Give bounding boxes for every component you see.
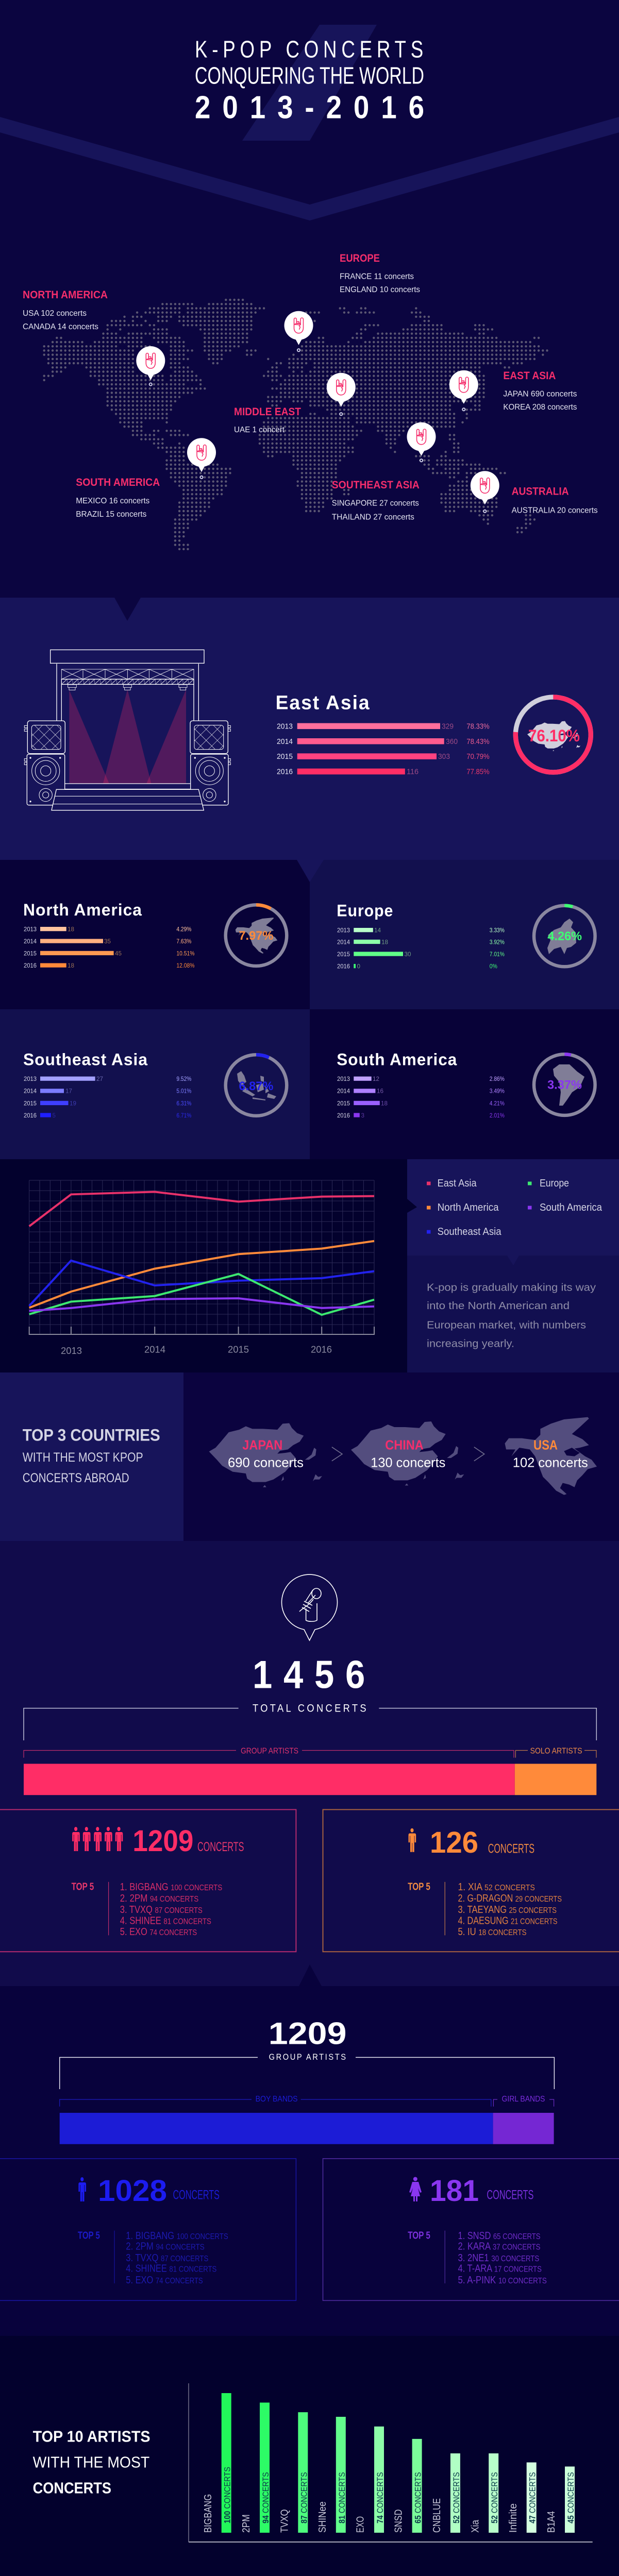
box: boy bands bbox=[0, 2159, 296, 2300]
top 5 list: 3. TAEYANG 25 CONCERTS bbox=[458, 1904, 557, 1916]
top 5 label: TOP 5 bbox=[408, 2230, 430, 2241]
artist names: EXO bbox=[355, 2516, 366, 2533]
notch between regional panels bbox=[297, 860, 324, 882]
bar chart: east asia: 360 bbox=[446, 737, 458, 746]
heading: southeast asia: Southeast Asia bbox=[23, 1050, 148, 1069]
value labels: 65 CONCERTS bbox=[413, 2472, 423, 2523]
chart year labels: 2014 bbox=[144, 1345, 165, 1355]
heading: north america: North America bbox=[23, 901, 142, 919]
donut chart: south america 3.37% bbox=[534, 1054, 595, 1115]
commentary text: increasing yearly. bbox=[427, 1338, 514, 1349]
bracket: total bbox=[24, 1708, 596, 1740]
bar chart: north america: 35 bbox=[104, 938, 111, 945]
artist names: BIGBANG bbox=[203, 2494, 214, 2533]
top 5 list: 4. T-ARA 17 CONCERTS bbox=[458, 2263, 542, 2275]
bar chart: south america: 18 bbox=[381, 1099, 388, 1107]
map: china: CHINA bbox=[385, 1437, 424, 1452]
panel: total concerts bbox=[0, 1541, 619, 1986]
value labels: 45 CONCERTS bbox=[566, 2472, 576, 2523]
line: south america bbox=[29, 1298, 374, 1311]
heading: top 10 artists: WITH THE MOST bbox=[33, 2453, 149, 2471]
stat: group concerts: 1209 bbox=[132, 1824, 193, 1858]
bar chart: south america: 2015 bbox=[337, 1099, 350, 1107]
stat unit: CONCERTS bbox=[197, 1840, 244, 1854]
bar chart: europe: 3.92% bbox=[490, 938, 505, 945]
panel: group artists bbox=[0, 1986, 619, 2336]
value labels: 81 CONCERTS bbox=[337, 2472, 347, 2523]
box: group artists bbox=[0, 1809, 296, 1952]
title: CONQUERING THE WORLD bbox=[195, 62, 424, 89]
bar chart: east asia bbox=[277, 722, 490, 776]
bar chart: north america: 18 bbox=[68, 962, 74, 969]
top 5 list: 1. BIGBANG 100 CONCERTS bbox=[120, 1882, 222, 1893]
bar chart: east asia: 116 bbox=[407, 768, 419, 776]
donut chart: southeast asia 6.87% bbox=[226, 1055, 287, 1116]
bar chart: east asia: 77.85% bbox=[466, 768, 490, 776]
top 5 list: 3. TVXQ 87 CONCERTS bbox=[120, 1904, 203, 1916]
map: usa: 102 concerts bbox=[513, 1454, 588, 1470]
value labels: 74 CONCERTS bbox=[375, 2472, 385, 2523]
top 5 list: 5. EXO 74 CONCERTS bbox=[120, 1926, 197, 1938]
top 5 list bbox=[458, 2230, 547, 2286]
icon: five people bbox=[72, 1827, 123, 1851]
map: japan bbox=[209, 1423, 322, 1487]
bar chart: europe: 2014 bbox=[337, 938, 350, 945]
bar chart: southeast asia: 6.31% bbox=[176, 1099, 192, 1107]
label: southeast asia: SINGAPORE 27 concerts bbox=[332, 499, 419, 508]
top 5 list bbox=[458, 1882, 562, 1938]
bar chart: southeast asia: 9.52% bbox=[176, 1075, 192, 1082]
icon: hand holding microphone bbox=[281, 1574, 337, 1640]
background: chevron band bbox=[0, 117, 619, 221]
bar chart: south america: 16 bbox=[377, 1088, 383, 1095]
bar chart: south america bbox=[337, 1075, 505, 1119]
bar chart: east asia: 2015 bbox=[277, 752, 293, 761]
bracket: group total bbox=[60, 2057, 554, 2089]
stat: solo concerts: 126 bbox=[430, 1826, 478, 1859]
value labels bbox=[223, 2467, 576, 2523]
commentary text bbox=[427, 1282, 596, 1349]
label: europe: ENGLAND 10 concerts bbox=[340, 285, 420, 294]
bar chart: east asia: 329 bbox=[442, 722, 454, 731]
icon: woman bbox=[409, 2177, 422, 2201]
bar chart: east asia: 78.33% bbox=[466, 722, 490, 731]
top 5 list: 5. IU 18 CONCERTS bbox=[458, 1926, 527, 1938]
label: middle east: MIDDLE EAST bbox=[234, 406, 301, 418]
panel: top 3 countries bbox=[183, 1372, 619, 1541]
top 5 list: 2. G-DRAGON 29 CONCERTS bbox=[458, 1893, 562, 1904]
bar chart: southeast asia: 2016 bbox=[24, 1112, 37, 1119]
chart axes bbox=[188, 2383, 189, 2542]
bar chart: southeast asia: 6.71% bbox=[176, 1112, 192, 1119]
top 5 list: 5. EXO 74 CONCERTS bbox=[126, 2275, 203, 2286]
label: east asia: EAST ASIA bbox=[503, 370, 556, 382]
bar chart: north america: 2016 bbox=[24, 962, 37, 969]
chart axis and ticks bbox=[29, 1327, 374, 1334]
donut chart: east asia 76.10%: 76.10% bbox=[528, 726, 580, 745]
background: title slash bbox=[242, 25, 377, 141]
stat unit: CONCERTS bbox=[173, 2188, 220, 2202]
map: europe bbox=[547, 919, 576, 954]
background: header and map section bbox=[0, 0, 619, 598]
bar chart: south america: 2.86% bbox=[490, 1075, 505, 1082]
top 5 divider bbox=[444, 2231, 445, 2283]
commentary text: into the North American and bbox=[427, 1300, 570, 1312]
top 5 list: 4. SHINEE 81 CONCERTS bbox=[126, 2263, 216, 2275]
bar chart: north america: 7.63% bbox=[176, 938, 192, 945]
bar chart: southeast asia: 2015 bbox=[24, 1099, 37, 1107]
label: solo artists: SOLO ARTISTS bbox=[530, 1747, 582, 1755]
title: 2013-2016 bbox=[195, 90, 436, 126]
group total number: 1209 bbox=[269, 2016, 346, 2050]
value labels: 47 CONCERTS bbox=[528, 2472, 538, 2523]
pin: middle east bbox=[327, 373, 356, 415]
value labels: 100 CONCERTS bbox=[223, 2467, 232, 2523]
value labels: 52 CONCERTS bbox=[490, 2472, 499, 2523]
top 5 list: 4. SHINEE 81 CONCERTS bbox=[120, 1916, 211, 1927]
bar chart: southeast asia: 17 bbox=[65, 1088, 72, 1095]
bar chart: europe: 2015 bbox=[337, 951, 350, 958]
title bbox=[195, 36, 436, 126]
label: south america: MEXICO 16 concerts bbox=[76, 497, 149, 505]
top 5 list: 2. 2PM 94 CONCERTS bbox=[120, 1893, 198, 1904]
pin: southeast asia bbox=[407, 422, 436, 462]
label: north america: NORTH AMERICA bbox=[23, 289, 108, 301]
top 5 list bbox=[120, 1882, 222, 1938]
value labels: 52 CONCERTS bbox=[451, 2472, 461, 2523]
bar chart: southeast asia: 5.01% bbox=[176, 1088, 192, 1095]
panel: top 3 countries heading: TOP 3 COUNTRIES bbox=[23, 1426, 160, 1444]
bar chart: north america: 12.08% bbox=[176, 962, 195, 969]
label: south america: SOUTH AMERICA bbox=[76, 477, 160, 488]
pin: north america bbox=[136, 346, 165, 386]
bar chart: southeast asia: 5 bbox=[53, 1112, 56, 1119]
artist names: CNBLUE bbox=[431, 2498, 443, 2533]
top 5 list: 3. TVXQ 87 CONCERTS bbox=[126, 2252, 208, 2264]
bar chart: europe bbox=[337, 926, 505, 970]
donut chart: east asia 76.10% bbox=[515, 697, 591, 772]
heading: top 10 artists: TOP 10 ARTISTS bbox=[33, 2427, 150, 2445]
artist names: 2PM bbox=[241, 2514, 252, 2533]
top 5 list: 1. SNSD 65 CONCERTS bbox=[458, 2230, 540, 2242]
arrow bbox=[474, 1447, 484, 1461]
line: east asia bbox=[29, 1192, 374, 1226]
label: southeast asia bbox=[332, 479, 420, 522]
legend: Southeast Asia bbox=[438, 1226, 501, 1238]
group total label: GROUP ARTISTS bbox=[269, 2052, 347, 2062]
map: usa bbox=[505, 1417, 597, 1495]
bar chart: southeast asia: 2014 bbox=[24, 1088, 37, 1095]
top 5 list: 5. A-PINK 10 CONCERTS bbox=[458, 2275, 547, 2286]
pin: east asia bbox=[449, 370, 478, 411]
panel: south america bbox=[310, 1009, 619, 1159]
line: north america bbox=[29, 1241, 374, 1308]
icon: person bbox=[409, 1828, 416, 1852]
box: solo artists bbox=[323, 1809, 619, 1952]
donut chart: north america 7.97%: 7.97% bbox=[239, 929, 273, 943]
bar chart: south america: 3.49% bbox=[490, 1088, 505, 1095]
heading: europe: Europe bbox=[337, 902, 393, 920]
panel: top 3 countries heading: CONCERTS ABROAD bbox=[23, 1471, 129, 1485]
map: usa: USA bbox=[533, 1437, 558, 1452]
pin: south america bbox=[187, 438, 216, 479]
pin: australia bbox=[471, 471, 499, 513]
map labels bbox=[23, 252, 598, 522]
legend: North America bbox=[438, 1202, 499, 1213]
stacked bar: boy vs girl bands bbox=[60, 2113, 554, 2144]
bar chart: east asia: 303 bbox=[438, 752, 450, 761]
grid lines bbox=[29, 1180, 374, 1334]
panel: top 3 countries heading: WITH THE MOST KPOP bbox=[23, 1450, 143, 1465]
artist names: Infinite bbox=[508, 2503, 519, 2533]
value labels: 87 CONCERTS bbox=[299, 2472, 309, 2523]
map: china: 130 concerts bbox=[371, 1454, 445, 1470]
top 5 list: 1. BIGBANG 100 CONCERTS bbox=[126, 2230, 228, 2242]
top 5 list: 1. XIA 52 CONCERTS bbox=[458, 1882, 535, 1893]
map: south america bbox=[553, 1064, 584, 1106]
artist names: SNSD bbox=[393, 2509, 405, 2533]
label: east asia: KOREA 208 concerts bbox=[503, 403, 577, 412]
label: europe: EUROPE bbox=[340, 252, 380, 264]
line: southeast asia bbox=[29, 1261, 374, 1306]
bracket: boy and girl bands bbox=[60, 2099, 554, 2107]
donut chart: north america 7.97% bbox=[226, 905, 287, 966]
bar chart: europe: 0 bbox=[357, 962, 360, 970]
line: europe bbox=[29, 1274, 374, 1315]
label: boy bands: BOY BANDS bbox=[256, 2095, 298, 2104]
map: southeast asia bbox=[237, 1071, 276, 1100]
bar chart: southeast asia bbox=[24, 1075, 192, 1119]
map: japan: JAPAN bbox=[242, 1437, 282, 1452]
label: east asia bbox=[503, 370, 577, 412]
chart year labels: 2015 bbox=[228, 1345, 249, 1355]
stat unit: CONCERTS bbox=[488, 1841, 534, 1856]
label: southeast asia: SOUTHEAST ASIA bbox=[332, 479, 420, 491]
top 5 label: TOP 5 bbox=[72, 1882, 94, 1893]
top 5 list bbox=[126, 2230, 228, 2286]
bar chart: north america: 2014 bbox=[24, 938, 37, 945]
panel: north america bbox=[0, 860, 310, 1009]
top 5 divider bbox=[444, 1882, 445, 1935]
bar chart: south america: 2016 bbox=[337, 1112, 350, 1119]
label: north america: USA 102 concerts bbox=[23, 309, 87, 318]
label: group artists: GROUP ARTISTS bbox=[241, 1747, 298, 1755]
bar chart: east asia: 70.79% bbox=[466, 752, 490, 761]
label: australia bbox=[512, 486, 598, 515]
dotted world map bbox=[44, 300, 547, 549]
map: china bbox=[351, 1421, 464, 1485]
artist names: B1A4 bbox=[546, 2511, 557, 2533]
icon: man bbox=[78, 2177, 86, 2201]
bar chart: east asia: 78.43% bbox=[466, 737, 490, 746]
bar chart: north america: 2013 bbox=[24, 925, 37, 933]
top 5 label: TOP 5 bbox=[78, 2230, 100, 2241]
donut chart: europe 4.26%: 4.26% bbox=[547, 929, 582, 943]
pin: europe bbox=[285, 311, 313, 351]
top 5 label: TOP 5 bbox=[408, 1882, 430, 1893]
panel: east asia bbox=[0, 598, 619, 860]
bar chart: east asia: 2013 bbox=[277, 722, 293, 731]
bar chart: north america: 4.29% bbox=[176, 925, 192, 933]
label: east asia: JAPAN 690 concerts bbox=[503, 389, 577, 398]
bar chart: north america: 10.51% bbox=[176, 950, 195, 957]
artist names bbox=[203, 2494, 557, 2533]
value labels: 94 CONCERTS bbox=[261, 2472, 271, 2523]
label: middle east bbox=[234, 406, 301, 434]
bar chart: north america: 18 bbox=[68, 925, 74, 933]
total label: TOTAL CONCERTS bbox=[253, 1703, 369, 1715]
bar chart: north america: 45 bbox=[115, 950, 122, 957]
bar chart: europe: 14 bbox=[374, 926, 381, 934]
bar chart: south america: 12 bbox=[373, 1075, 379, 1082]
title: K-POP CONCERTS bbox=[195, 36, 428, 63]
panel: line chart bbox=[0, 1159, 407, 1372]
label: south america: BRAZIL 15 concerts bbox=[76, 510, 146, 519]
top 5 list: 3. 2NE1 30 CONCERTS bbox=[458, 2252, 539, 2264]
artist names: SHINee bbox=[317, 2501, 328, 2533]
bracket: group and solo bbox=[24, 1751, 596, 1758]
map pins bbox=[136, 311, 499, 513]
panel: legend and commentary bbox=[407, 1159, 619, 1372]
legend: South America bbox=[540, 1202, 603, 1213]
chart year labels: 2013 bbox=[61, 1346, 82, 1356]
label: australia: AUSTRALIA bbox=[512, 486, 569, 498]
donut chart: europe 4.26% bbox=[534, 906, 595, 967]
box: girl bands bbox=[323, 2159, 619, 2300]
heading: east asia: East Asia bbox=[276, 692, 371, 714]
map: japan: 690 concerts bbox=[228, 1454, 304, 1470]
panel: top 10 artists bbox=[0, 2336, 619, 2576]
bar chart: east asia: 2014 bbox=[277, 737, 293, 746]
top 5 list: 2. KARA 37 CONCERTS bbox=[458, 2241, 540, 2252]
label: girl bands: GIRL BANDS bbox=[502, 2095, 545, 2104]
donut chart: south america 3.37%: 3.37% bbox=[547, 1078, 582, 1092]
top 5 list: 4. DAESUNG 21 CONCERTS bbox=[458, 1916, 558, 1927]
label: australia: AUSTRALIA 20 concerts bbox=[512, 506, 598, 515]
bar chart: europe: 0% bbox=[490, 962, 497, 970]
label: europe: FRANCE 11 concerts bbox=[340, 272, 414, 281]
bar chart: europe: 18 bbox=[381, 938, 388, 945]
donut chart: southeast asia 6.87%: 6.87% bbox=[239, 1079, 273, 1093]
chart year labels: 2016 bbox=[311, 1345, 332, 1355]
bar chart: south america: 2.01% bbox=[490, 1112, 505, 1119]
total number: 1456 bbox=[253, 1653, 376, 1697]
label: southeast asia: THAILAND 27 concerts bbox=[332, 513, 414, 522]
bar chart: europe: 3.33% bbox=[490, 926, 505, 934]
bar chart: north america: 2015 bbox=[24, 950, 37, 957]
label: north america: CANADA 14 concerts bbox=[23, 323, 98, 331]
bar chart: south america: 3 bbox=[361, 1112, 364, 1119]
legend bbox=[427, 1178, 603, 1238]
top 5 list: 2. 2PM 94 CONCERTS bbox=[126, 2241, 205, 2252]
chart baseline bbox=[189, 2541, 593, 2543]
bar chart: southeast asia: 27 bbox=[96, 1075, 103, 1082]
commentary text: K-pop is gradually making its way bbox=[427, 1282, 596, 1293]
legend: East Asia bbox=[438, 1178, 477, 1189]
label: north america bbox=[23, 289, 108, 331]
arrow bbox=[332, 1447, 342, 1461]
panel: europe bbox=[310, 860, 619, 1009]
bar chart: southeast asia: 19 bbox=[70, 1099, 76, 1107]
panel: southeast asia bbox=[0, 1009, 310, 1159]
bar chart: europe: 7.01% bbox=[490, 951, 505, 958]
heading: top 10 artists: CONCERTS bbox=[33, 2479, 111, 2497]
bar chart: southeast asia: 2013 bbox=[24, 1075, 37, 1082]
bar chart: south america: 4.21% bbox=[490, 1099, 505, 1107]
chart year labels bbox=[61, 1345, 332, 1356]
label: europe bbox=[340, 252, 420, 294]
icon: concert stage bbox=[24, 650, 230, 810]
label: south america bbox=[76, 477, 160, 519]
bar chart: europe: 2013 bbox=[337, 926, 350, 934]
bar chart: south america: 2013 bbox=[337, 1075, 350, 1082]
bar chart: europe: 2016 bbox=[337, 962, 350, 970]
bar chart: north america bbox=[24, 925, 195, 969]
bar chart: europe: 30 bbox=[404, 951, 411, 958]
panel: top 3 countries heading bbox=[0, 1372, 183, 1541]
stat: boy band concerts: 1028 bbox=[98, 2174, 167, 2208]
heading: south america: South America bbox=[337, 1050, 457, 1069]
bar chart: south america: 2014 bbox=[337, 1088, 350, 1095]
top 5 divider bbox=[108, 1882, 109, 1935]
top 5 divider bbox=[114, 2231, 115, 2283]
heading: top 10 artists bbox=[33, 2427, 150, 2497]
legend: Europe bbox=[540, 1178, 569, 1189]
bar chart: east asia: 2016 bbox=[277, 768, 293, 776]
label: middle east: UAE 1 concert bbox=[234, 426, 285, 434]
commentary text: European market, with numbers bbox=[427, 1320, 586, 1331]
stacked bar: group vs solo bbox=[24, 1764, 596, 1795]
bars bbox=[222, 2393, 575, 2533]
artist names: Xia bbox=[470, 2519, 481, 2533]
stat unit: CONCERTS bbox=[487, 2188, 533, 2202]
artist names: TVXQ bbox=[279, 2509, 290, 2533]
stat: girl band concerts: 181 bbox=[430, 2174, 479, 2208]
